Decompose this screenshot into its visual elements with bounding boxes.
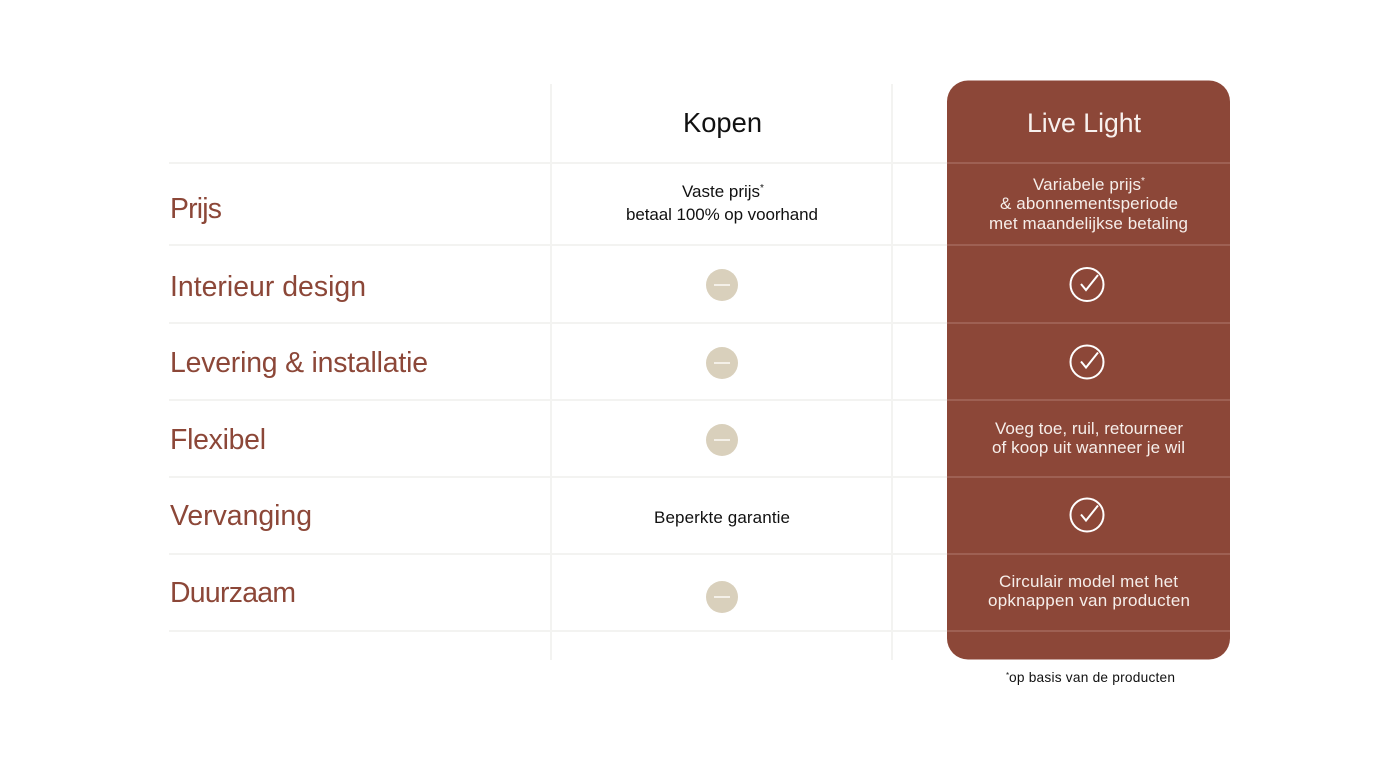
- text: variable price: [989, 175, 1188, 233]
- text: variable price: Variabele prijs: [1033, 175, 1141, 194]
- text: flexible: Voeg toe, ruil, retourneer: [995, 419, 1183, 438]
- icon: check replacement: [1070, 498, 1104, 532]
- label: Duurzaam: Duurzaam: [170, 577, 296, 609]
- label: Prijs: Prijs: [170, 193, 222, 225]
- text: variable price: *: [1141, 176, 1145, 187]
- text: variable price: met maandelijkse betaling: [989, 214, 1188, 233]
- text: variable price: & abonnementsperiode: [1000, 194, 1178, 213]
- icon: minus delivery and installation: [706, 347, 738, 379]
- panel: Live Light column: [947, 80, 1230, 660]
- text: fixed price: Vaste prijs: [682, 182, 760, 201]
- heading: Live Light: Live Light: [1027, 108, 1142, 138]
- footnote: *: [1006, 671, 1009, 680]
- text: flexible: of koop uit wanneer je wil: [992, 438, 1185, 457]
- label: Flexibel: Flexibel: [170, 424, 266, 456]
- icon: minus flexible: [706, 424, 738, 456]
- text: fixed price: betaal 100% op voorhand: [626, 205, 818, 224]
- text: limited warranty: Beperkte garantie: [654, 508, 790, 527]
- label: Vervanging: Vervanging: [170, 500, 312, 532]
- text: sustainable: [988, 572, 1190, 610]
- text: sustainable: Circulair model met het: [999, 572, 1178, 591]
- label: Interieur design: Interieur design: [170, 271, 366, 303]
- text: fixed price: [626, 182, 818, 224]
- icon: minus sustainable: [706, 581, 738, 613]
- text: fixed price: *: [760, 183, 764, 194]
- label: Levering & installatie: Levering & installatie: [170, 347, 428, 379]
- icon: minus interior design: [706, 269, 738, 301]
- icon: check interior design: [1070, 268, 1104, 301]
- text: sustainable: opknappen van producten: [988, 591, 1190, 610]
- text: flexible: [992, 419, 1185, 457]
- heading: Kopen: Kopen: [683, 107, 762, 138]
- footnote: op basis van de producten: [1009, 670, 1175, 685]
- icon: check delivery and installation: [1070, 346, 1104, 378]
